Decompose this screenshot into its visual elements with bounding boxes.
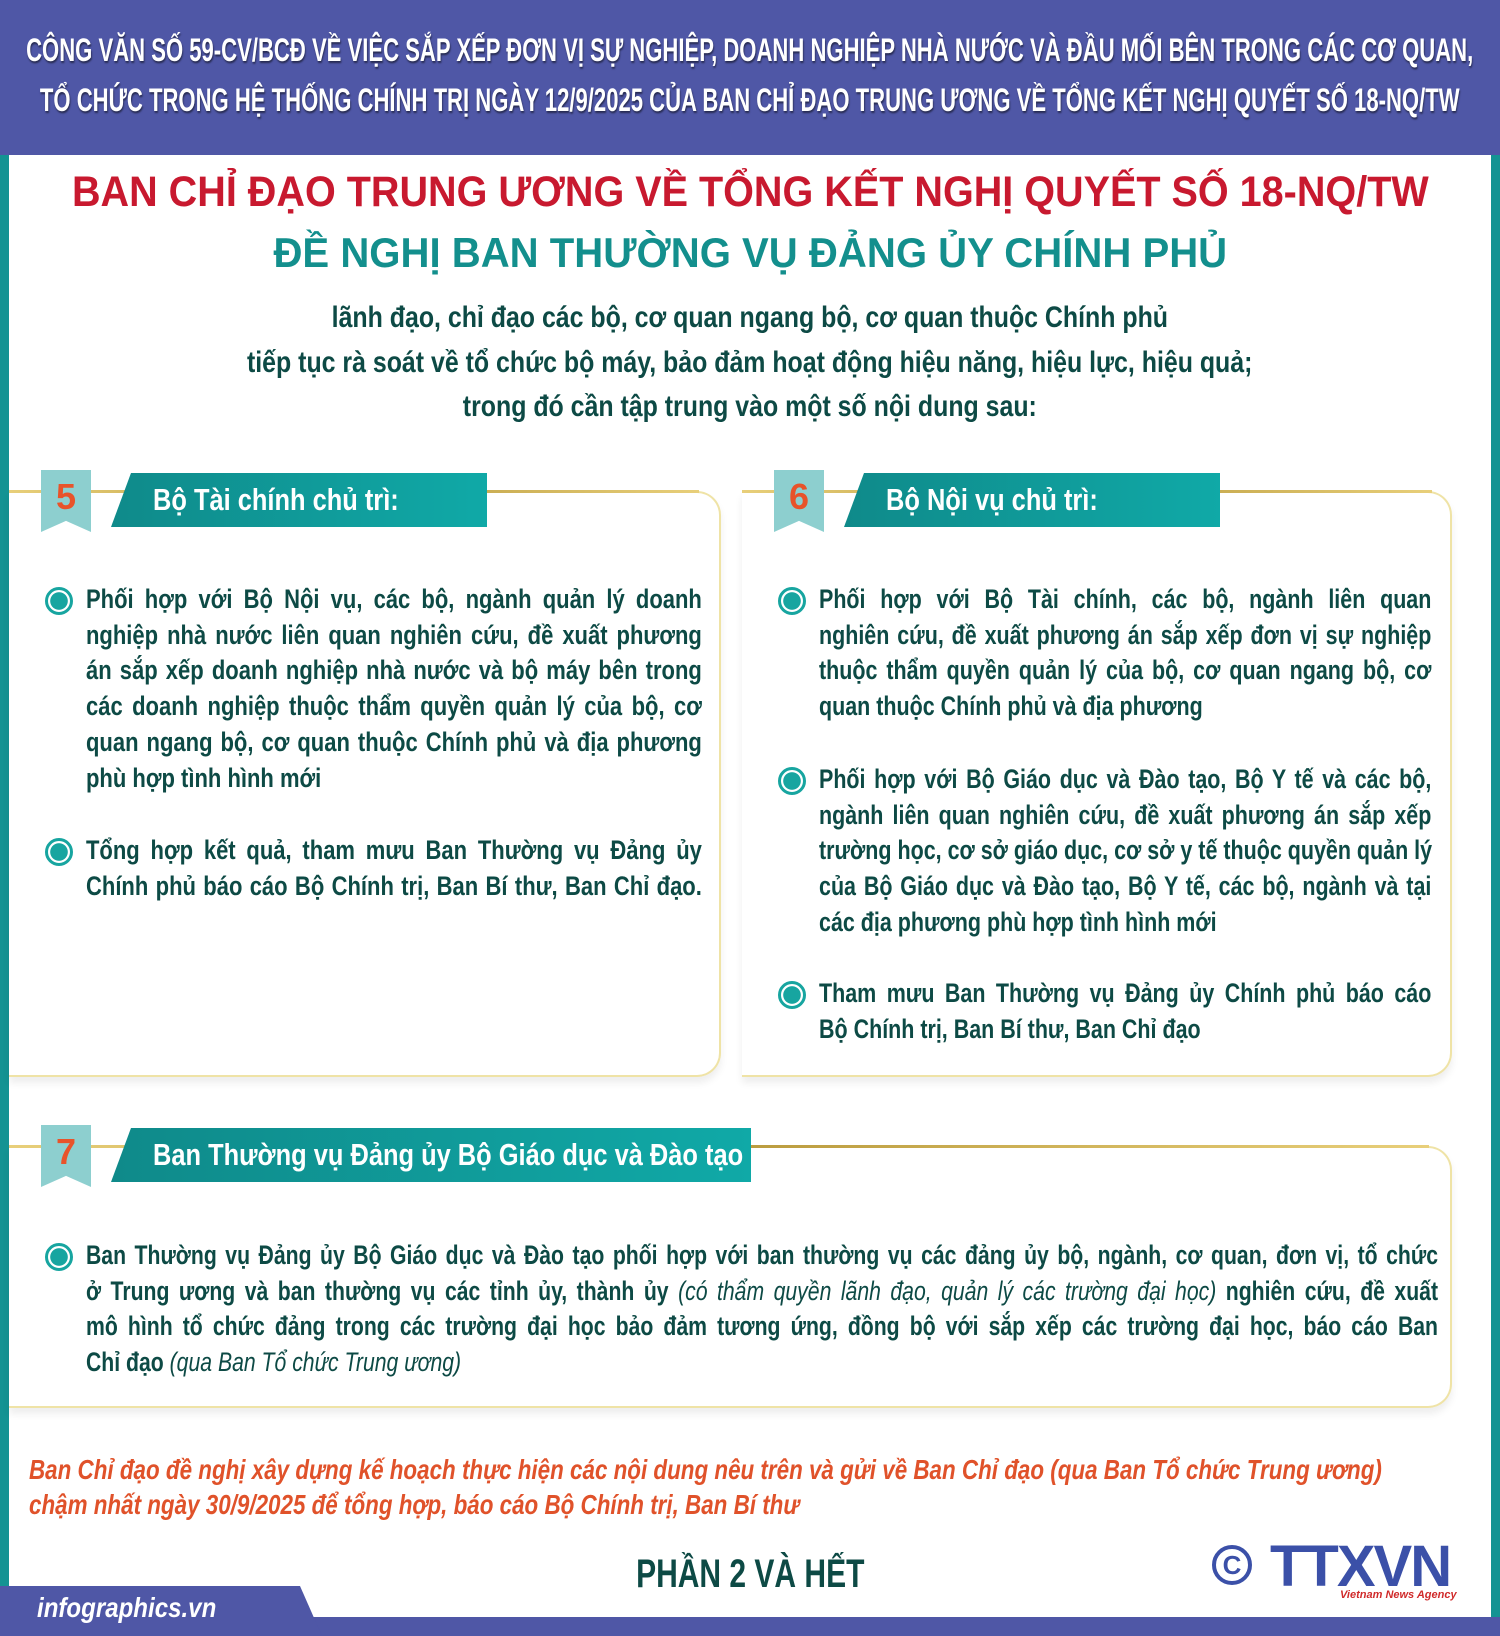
footer site label: infographics.vn	[37, 1592, 216, 1623]
title red: BAN CHỈ ĐẠO TRUNG ƯƠNG VỀ TỔNG KẾT NGHỊ QUYẾT SỐ 18-NQ/TW	[72, 168, 1428, 216]
bullet 6.2: ngành liên quan nghiên cứu, đề xuất phương án sắp xếp	[819, 800, 1431, 830]
bullet 6.2: Phối hợp với Bộ Giáo dục và Đào tạo, Bộ Y tế và các bộ,	[819, 764, 1431, 794]
logo TTXVN: Vietnam News Agency	[1340, 1589, 1457, 1601]
bullet 5.2: Chính phủ báo cáo Bộ Chính trị, Ban Bí thư, Ban Chỉ đạo.	[86, 871, 702, 901]
bullet 5.1: nghiệp nhà nước liên quan nghiên cứu, đề xuất phương	[86, 620, 702, 650]
bullet 6.2: các địa phương phù hợp tình hình mới	[819, 907, 1217, 937]
header banner	[0, 0, 1500, 155]
closing note orange	[29, 1454, 1382, 1520]
logo TTXVN: TTXVN	[1270, 1534, 1450, 1599]
tab heading 6	[844, 473, 1220, 527]
header banner: CÔNG VĂN SỐ 59-CV/BCĐ VỀ VIỆC SẮP XẾP ĐƠN VỊ SỰ NGHIỆP, DOANH NGHIỆP NHÀ NƯỚC VÀ ĐẦU MỐI BÊN TRONG CÁC CƠ QUAN,	[26, 32, 1474, 68]
bullet 6.2: của Bộ Giáo dục và Đào tạo, Bộ Y tế, các bộ, ngành và tại	[819, 871, 1431, 901]
bullet 5.2: Tổng hợp kết quả, tham mưu Ban Thường vụ Đảng ủy	[86, 835, 702, 865]
bullet 5.1: Phối hợp với Bộ Nội vụ, các bộ, ngành quản lý doanh	[86, 584, 702, 614]
bullet 5.1: quan ngang bộ, cơ quan thuộc Chính phủ và địa phương	[86, 727, 702, 757]
header banner: TỔ CHỨC TRONG HỆ THỐNG CHÍNH TRỊ NGÀY 12/9/2025 CỦA BAN CHỈ ĐẠO TRUNG ƯƠNG VỀ TỔNG KẾT NGHỊ QUYẾT SỐ 18-NQ/TW	[40, 82, 1460, 118]
tab heading 7	[111, 1128, 751, 1182]
badge 7	[41, 1125, 91, 1187]
bullet 6.1	[778, 584, 1432, 721]
subtitle teal: ĐỀ NGHỊ BAN THƯỜNG VỤ ĐẢNG ỦY CHÍNH PHỦ	[273, 229, 1227, 276]
panel 6	[742, 470, 1452, 1083]
badge 5: 5	[56, 476, 76, 517]
bullet 6.1: Phối hợp với Bộ Tài chính, các bộ, ngành liên quan	[819, 584, 1431, 614]
bullet 5.1: phù hợp tình hình mới	[86, 763, 321, 793]
tab heading 6: Bộ Nội vụ chủ trì:	[886, 482, 1098, 517]
closing note orange: Ban Chỉ đạo đề nghị xây dựng kế hoạch thực hiện các nội dung nêu trên và gửi về Ban Chỉ đạo (qua Ban Tổ chức Trung ương)	[29, 1454, 1382, 1485]
bullet 5.1: án sắp xếp doanh nghiệp nhà nước và bộ máy bên trong	[86, 655, 702, 685]
intro text: trong đó cần tập trung vào một số nội dung sau:	[463, 390, 1037, 423]
badge 7: 7	[56, 1131, 76, 1172]
bullet 7.1: ở Trung ương và ban thường vụ các tỉnh ủy, thành ủy (có thẩm quyền lãnh đạo, quản lý các trường đại học) nghiên cứu, đề xuất	[86, 1276, 1438, 1306]
bullet 7.1: mô hình tổ chức đảng trong các trường đại học bảo đảm tương ứng, đồng bộ với sắp xếp các trường đại học, báo cáo Ban	[86, 1311, 1438, 1341]
badge 6: 6	[789, 476, 809, 517]
part label: PHẦN 2 VÀ HẾT	[636, 1552, 864, 1596]
bullet 5.1: các doanh nghiệp thuộc thẩm quyền quản lý của bộ, cơ	[86, 691, 702, 721]
bullet 6.3: Bộ Chính trị, Ban Bí thư, Ban Chỉ đạo	[819, 1014, 1201, 1044]
panel 5	[9, 470, 721, 1083]
tab heading 7: Ban Thường vụ Đảng ủy Bộ Giáo dục và Đào tạo	[153, 1137, 743, 1172]
bullet 7.1: Ban Thường vụ Đảng ủy Bộ Giáo dục và Đào tạo phối hợp với ban thường vụ các đảng ủy bộ, ngành, cơ quan, đơn vị, tổ chức	[86, 1240, 1438, 1270]
bullet 5.1	[45, 584, 702, 793]
badge 6	[774, 470, 824, 532]
bullet 6.3	[778, 978, 1431, 1044]
intro text	[247, 301, 1253, 423]
bullet 6.2	[778, 764, 1432, 937]
bullet 7.1	[45, 1240, 1438, 1377]
panel 7	[9, 1125, 1452, 1414]
badge 5	[41, 470, 91, 532]
closing note orange: chậm nhất ngày 30/9/2025 để tổng hợp, báo cáo Bộ Chính trị, Ban Bí thư	[29, 1489, 799, 1520]
tab heading 5	[111, 473, 487, 527]
bullet 5.2	[45, 835, 702, 901]
bullet 7.1: Chỉ đạo (qua Ban Tổ chức Trung ương)	[86, 1347, 461, 1377]
bullet 6.3: Tham mưu Ban Thường vụ Đảng ủy Chính phủ báo cáo	[819, 978, 1431, 1008]
footer	[0, 1617, 1500, 1636]
bullet 6.1: thuộc thẩm quyền quản lý của bộ, cơ quan ngang bộ, cơ	[819, 655, 1431, 685]
bullet 6.1: nghiên cứu, đề xuất phương án sắp xếp đơn vị sự nghiệp	[819, 620, 1431, 650]
intro text: lãnh đạo, chỉ đạo các bộ, cơ quan ngang bộ, cơ quan thuộc Chính phủ	[332, 301, 1168, 334]
logo TTXVN: C	[1223, 1550, 1241, 1580]
intro text: tiếp tục rà soát về tổ chức bộ máy, bảo đảm hoạt động hiệu năng, hiệu lực, hiệu quả;	[247, 346, 1253, 378]
bullet 6.1: quan thuộc Chính phủ và địa phương	[819, 691, 1203, 721]
tab heading 5: Bộ Tài chính chủ trì:	[153, 482, 399, 517]
bullet 6.2: trường học, cơ sở giáo dục, cơ sở y tế thuộc quyền quản lý	[819, 835, 1432, 865]
